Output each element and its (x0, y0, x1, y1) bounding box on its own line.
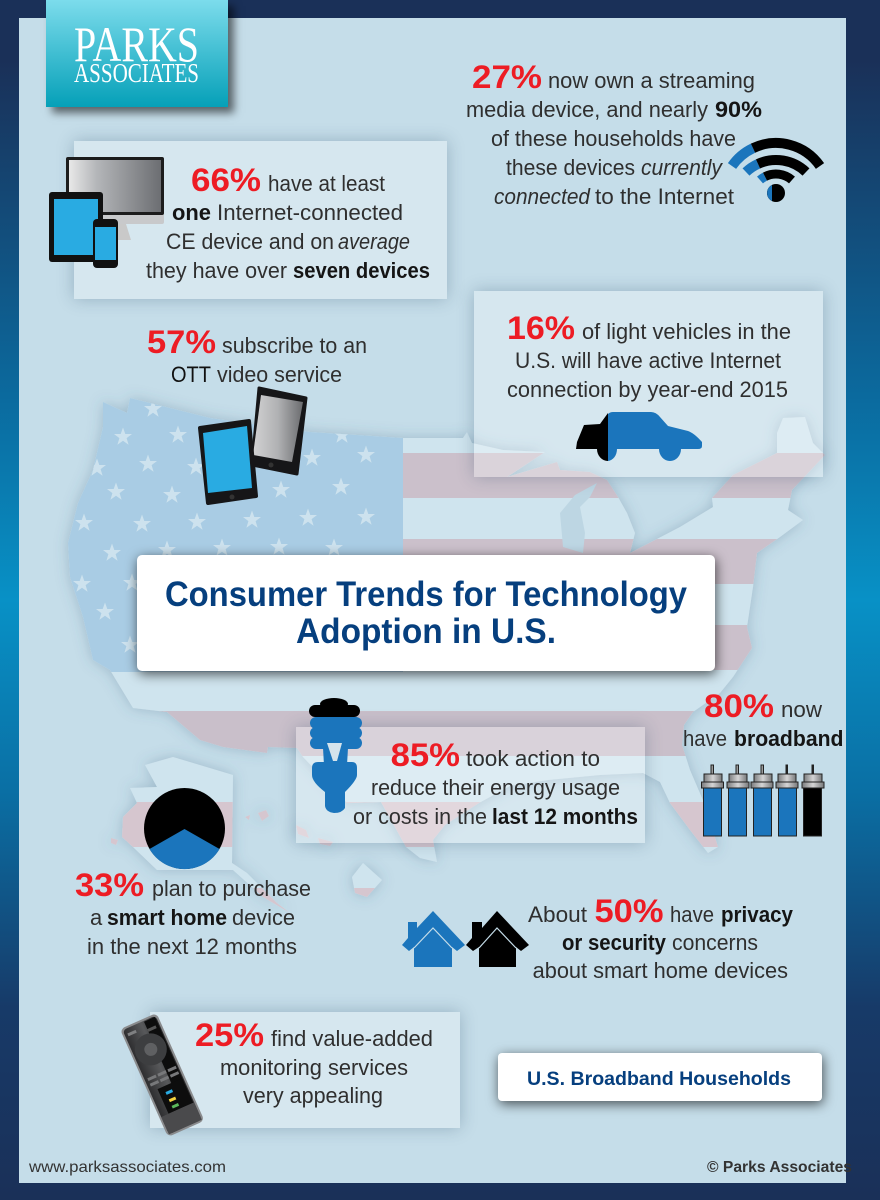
text: 50% statement: have (670, 902, 714, 927)
text: 66% statement: CE device and on (166, 229, 334, 254)
text: 25% statement: very appealing (243, 1083, 383, 1108)
text: 80% statement (683, 688, 844, 751)
text: 27% statement: these devices (506, 155, 635, 180)
text: 85% statement: or costs in the (353, 804, 487, 829)
text: 85% statement (353, 737, 638, 829)
icon: remote control (120, 1013, 204, 1137)
title (137, 555, 715, 671)
text: 66% statement: 66% (191, 162, 261, 198)
text: 33% statement: a (90, 905, 103, 930)
text: 50% statement: About (528, 902, 587, 927)
text: 27% statement: currently (641, 155, 724, 180)
text: 27% statement: 90% (715, 97, 762, 122)
caption: U.S. Broadband Households: U.S. Broadband Households (527, 1069, 791, 1090)
logo: Parks Associates: PARKS (74, 16, 199, 72)
text: 85% statement: took action to (466, 746, 600, 771)
text: 27% statement: media device, and nearly (466, 97, 708, 122)
icon: car (576, 412, 702, 461)
text: 80% statement: 80% (704, 688, 774, 724)
text: 57% statement: video service (217, 362, 342, 387)
panel: 66% devices (74, 141, 447, 299)
text: 50% statement: privacy (721, 902, 794, 927)
text: 27% statement: 27% (472, 59, 542, 95)
text: 66% statement: they have over (146, 258, 287, 283)
text: 66% statement: have at least (268, 171, 385, 196)
text: 57% statement: subscribe to an (222, 333, 367, 358)
text: 16% statement: 16% (507, 310, 575, 346)
text: 66% statement (146, 162, 430, 283)
text: 50% statement: about smart home devices (533, 958, 788, 983)
logo: Parks Associates (46, 0, 228, 107)
icon: light bulb (309, 698, 362, 813)
text: 25% statement: find value-added (271, 1026, 433, 1051)
text: 66% statement: one (172, 200, 211, 225)
footer: website and copyright: www.parksassociates.com (28, 1159, 226, 1176)
icon: monitor, tablet and phone (49, 157, 164, 268)
footer: website and copyright (28, 1159, 852, 1176)
text: 25% statement (195, 1017, 433, 1108)
panel: 16% vehicles (474, 291, 823, 477)
text: 33% statement: 33% (75, 867, 144, 903)
icon: two houses (402, 911, 529, 967)
text: 85% statement: 85% (391, 737, 460, 773)
panel: 85% energy (296, 727, 645, 843)
text: 50% statement: concerns (672, 930, 758, 955)
text: 33% statement: smart home (107, 905, 227, 930)
panel: 25% monitoring services (150, 1012, 460, 1128)
text: 16% statement: connection by year-end 2015 (507, 377, 788, 402)
icon: wifi (732, 143, 820, 202)
text: 27% statement: connected (494, 184, 591, 209)
text: 66% statement: average (338, 229, 410, 254)
panel: 27% streaming media (466, 59, 824, 209)
panel: 57% OTT (147, 324, 367, 505)
text: 66% statement: seven devices (293, 258, 430, 283)
title: Adoption in U.S. (296, 612, 556, 651)
text: 57% statement (147, 324, 367, 387)
text: 80% statement: broadband (734, 726, 844, 751)
title: Consumer Trends for Technology (165, 575, 687, 614)
logo: Parks Associates: ASSOCIATES (74, 58, 199, 88)
text: 33% statement: device (232, 905, 295, 930)
text: 25% statement: monitoring services (220, 1055, 408, 1080)
text: 50% statement: 50% (594, 893, 664, 929)
text: 27% statement: of these households have (491, 126, 736, 151)
text: 85% statement: reduce their energy usage (371, 775, 620, 800)
text: 33% statement: in the next 12 months (87, 934, 297, 959)
text: 66% statement: Internet-connected (217, 200, 403, 225)
text: 25% statement: 25% (195, 1017, 264, 1053)
text: 33% statement: plan to purchase (152, 876, 311, 901)
text: 80% statement: have (683, 726, 727, 751)
text: 57% statement: OTT (171, 362, 211, 387)
text: 57% statement: 57% (147, 324, 216, 360)
map: US flag map (63, 395, 826, 912)
text: 27% statement: to the Internet (595, 184, 734, 209)
text: 16% statement: U.S. will have active Internet (515, 348, 781, 373)
chart: pie 33% (144, 788, 225, 869)
chart: five broadband cables (702, 765, 824, 836)
panel: 80% broadband (683, 688, 844, 836)
text: 80% statement: now (781, 697, 822, 722)
text: 50% statement (528, 893, 794, 983)
text: 85% statement: last 12 months (492, 804, 638, 829)
footer: website and copyright: © Parks Associates (707, 1159, 852, 1176)
caption: U.S. Broadband Households (498, 1053, 822, 1101)
icon: two phones (200, 388, 306, 503)
text: 33% statement (75, 867, 311, 959)
text: 16% statement (507, 310, 791, 402)
text: 16% statement: of light vehicles in the (582, 319, 791, 344)
text: 27% statement (466, 59, 762, 209)
text: 50% statement: or security (562, 930, 667, 955)
text: 27% statement: now own a streaming (548, 68, 755, 93)
